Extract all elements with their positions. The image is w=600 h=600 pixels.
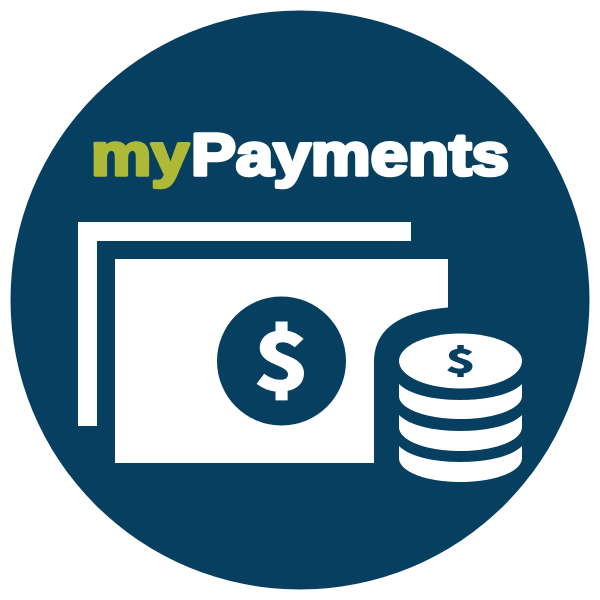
title part: Payments: Payments: [191, 122, 509, 188]
top coin dollar sign: $: [446, 336, 475, 382]
banknote dollar medallion: [217, 296, 346, 426]
coin layer 1: [399, 384, 522, 419]
back banknote outline: [78, 222, 411, 426]
top coin: [399, 334, 522, 388]
title part: my: my: [91, 122, 189, 188]
banknote dollar medallion: $: [254, 298, 309, 412]
front banknote: [115, 259, 448, 463]
coin layer 2: [399, 415, 522, 451]
coin layer 3: [399, 446, 522, 482]
title: myPayments: [91, 122, 509, 188]
icon: banknotes: [78, 222, 448, 463]
icon: coin stack: [399, 334, 522, 482]
